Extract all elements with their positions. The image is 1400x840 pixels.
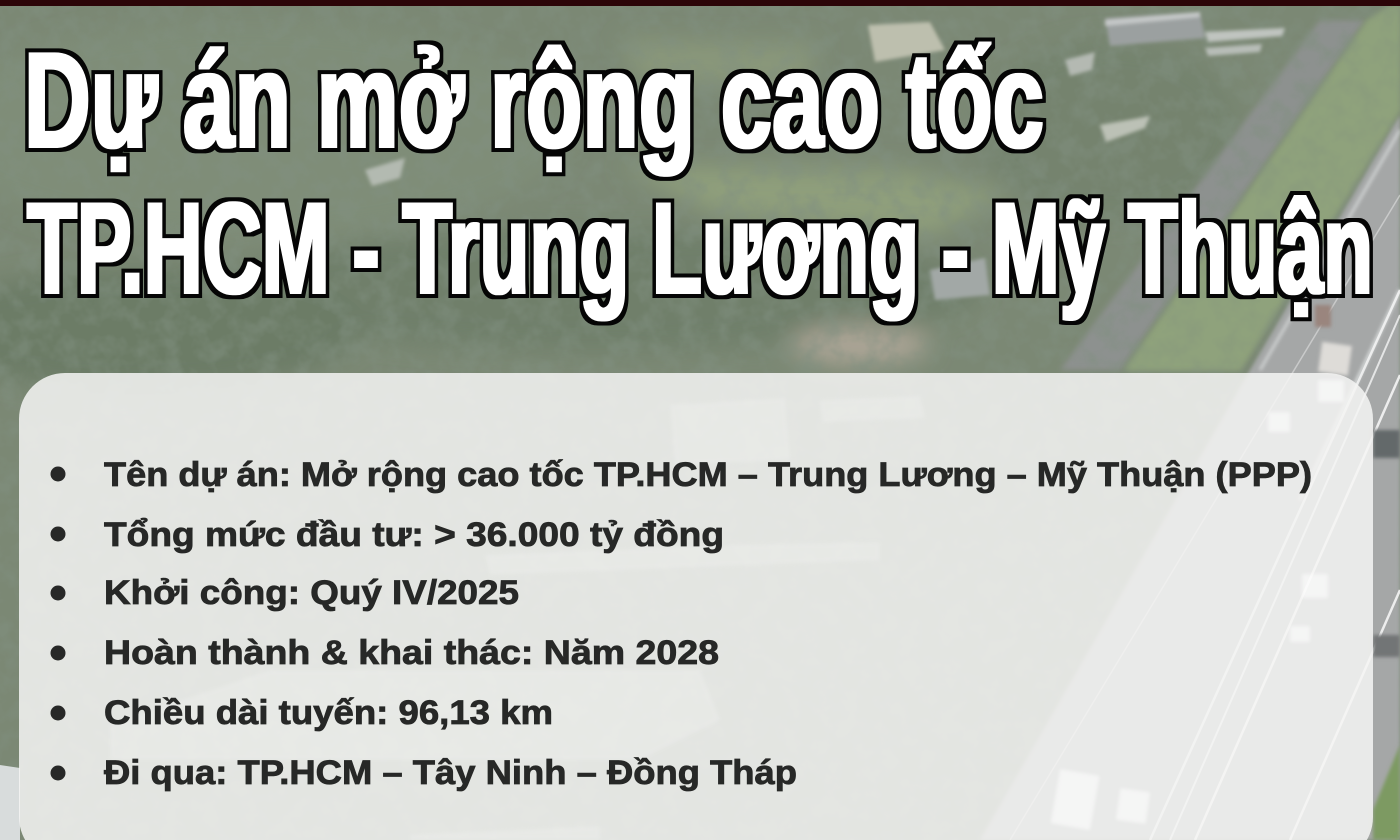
faint buildings beneath panel	[110, 396, 925, 840]
panel: project facts	[19, 373, 1373, 840]
item: total investment: Tổng mức đầu tư: > 36.000 tỷ đồng	[104, 516, 724, 554]
top dark maroon strip	[0, 0, 1400, 6]
title	[24, 24, 1373, 321]
item: completion: Hoàn thành & khai thác: Năm 2028	[104, 634, 719, 672]
buildings at top	[365, 12, 1285, 300]
service road	[1060, 20, 1365, 370]
left roof below panel	[0, 765, 20, 840]
item: route length: Chiều dài tuyến: 96,13 km	[104, 694, 553, 732]
highway lines	[1260, 130, 1400, 500]
bullet list	[50, 456, 1312, 792]
item: project name: Tên dự án: Mở rộng cao tốc TP.HCM – Trung Lương – Mỹ Thuận (PPP)	[104, 456, 1312, 494]
trucks and cars	[1315, 305, 1352, 376]
item: provinces crossed: Đi qua: TP.HCM – Tây Ninh – Đồng Tháp	[104, 754, 797, 792]
grass verge	[1125, 0, 1400, 370]
highway	[980, 115, 1400, 840]
item: start date: Khởi công: Quý IV/2025	[104, 574, 519, 612]
right side lower	[1373, 430, 1400, 458]
